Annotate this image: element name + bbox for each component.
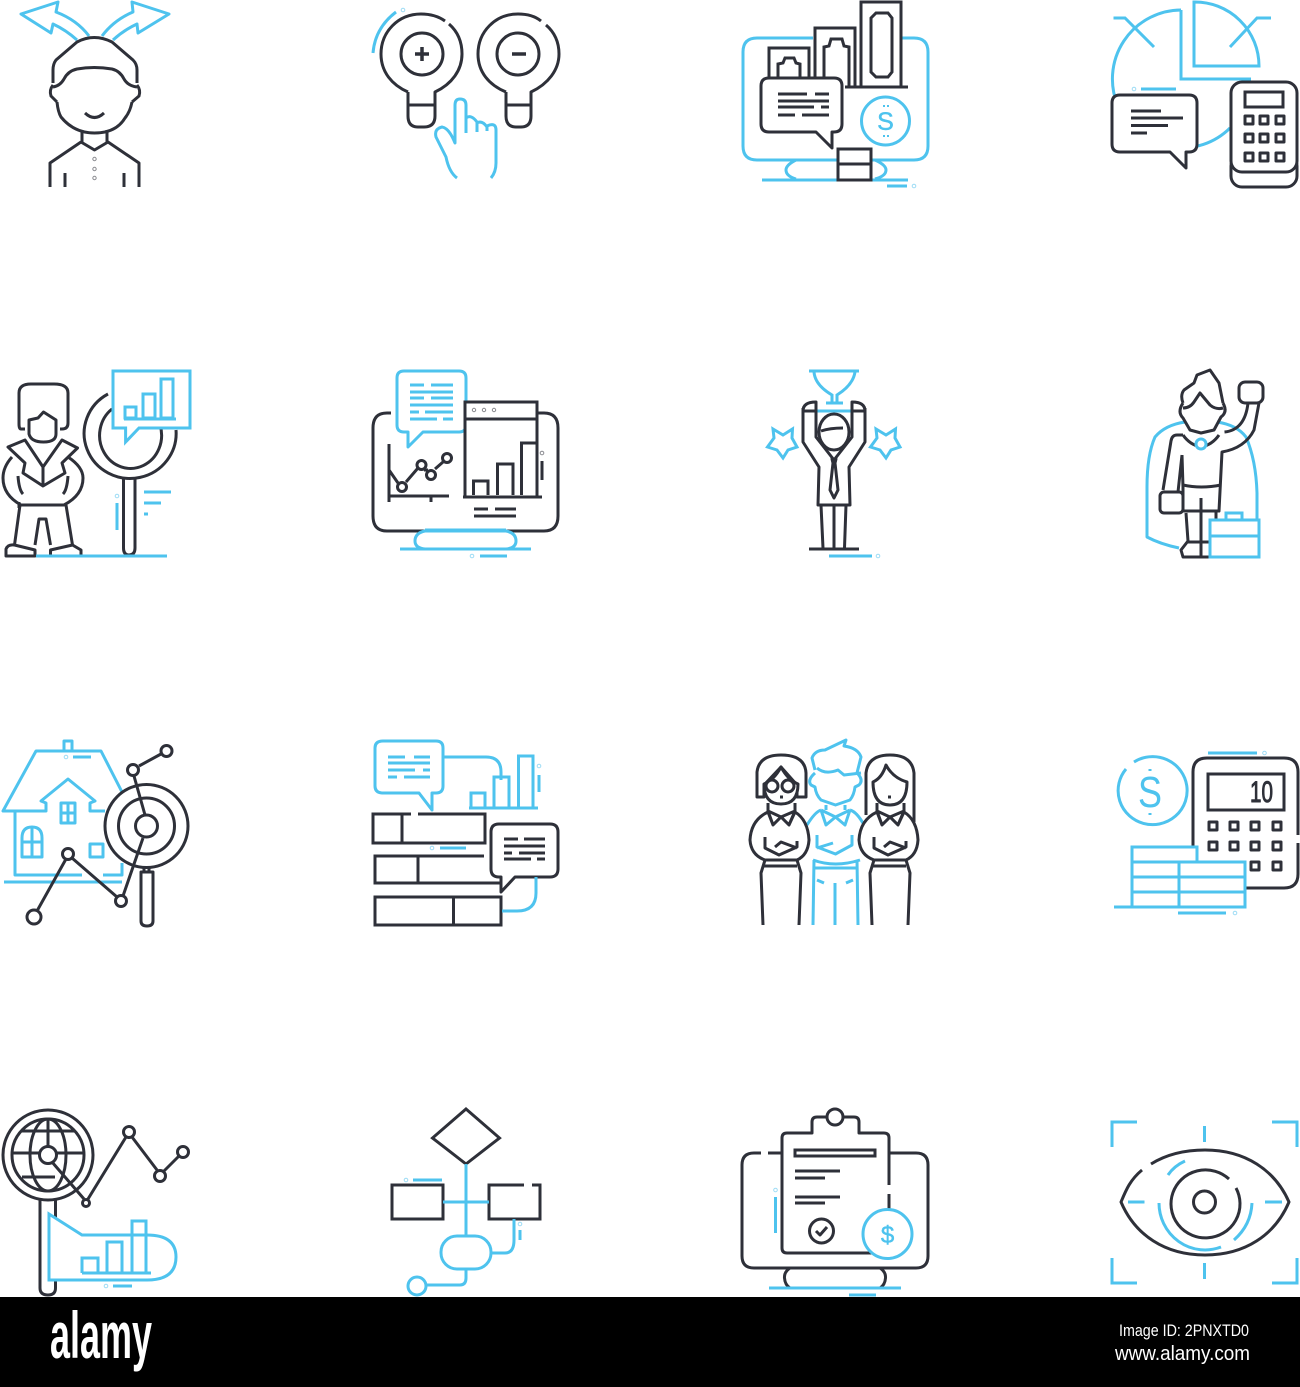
person xyxy=(3,384,83,556)
bar chart xyxy=(469,756,541,808)
dollar coin: $ xyxy=(881,1222,894,1249)
magnifier target xyxy=(105,784,188,926)
pointing hand xyxy=(373,8,496,178)
focus brackets and ticks xyxy=(1112,1122,1297,1283)
icon: eye with focus brackets xyxy=(1112,1122,1297,1283)
calculator body xyxy=(1193,758,1298,888)
dollar coin xyxy=(1118,757,1187,825)
icon: team of three with arms crossed xyxy=(750,740,918,925)
cape xyxy=(1147,422,1257,548)
icon: house with target and line chart xyxy=(3,741,188,926)
monitor xyxy=(742,1153,928,1288)
stars xyxy=(768,429,900,458)
bricks xyxy=(373,814,501,925)
clipboard xyxy=(782,1109,889,1253)
icon: person with diverging arrows xyxy=(21,2,169,187)
coin stacks xyxy=(1114,751,1266,915)
man in the middle xyxy=(807,740,864,925)
figure xyxy=(803,402,865,549)
icon: monitor with charts and speech bubble xyxy=(373,371,558,558)
icon: businessman raising trophy xyxy=(768,371,900,558)
house xyxy=(3,741,122,882)
speech bubble xyxy=(1112,95,1197,168)
icon: calculator, dollar coin and coin stacks xyxy=(1114,751,1298,915)
ground and accents xyxy=(36,492,171,556)
connectors xyxy=(404,1164,522,1295)
line chart xyxy=(52,1126,188,1206)
logo: alamy: alamy xyxy=(50,1298,152,1372)
minus bulb xyxy=(478,14,559,127)
plus bulb xyxy=(381,14,462,127)
icon: superhero businessman with briefcase xyxy=(1147,370,1263,557)
monitor stand xyxy=(400,530,531,558)
speech bubble xyxy=(761,78,842,148)
image id: Image ID: 2PNXTD0 xyxy=(1119,1321,1249,1340)
blue chart panel xyxy=(49,1214,176,1288)
person figure xyxy=(50,38,140,187)
monitor xyxy=(743,38,928,188)
eye outline xyxy=(1121,1150,1289,1255)
pie chart xyxy=(1112,2,1271,148)
shirt buttons xyxy=(93,157,96,180)
diamond and boxes xyxy=(392,1109,540,1219)
dollar coin xyxy=(862,97,910,145)
icon: clipboard on monitor with dollar coin xyxy=(742,1109,928,1295)
accent line xyxy=(829,554,880,558)
magnifying glass xyxy=(84,394,176,555)
dark speech bubble xyxy=(491,824,558,892)
blue speech bubble xyxy=(375,741,501,810)
chart bubble xyxy=(113,371,190,442)
hero figure xyxy=(1160,370,1263,557)
accents and base xyxy=(769,1188,901,1295)
footer bar xyxy=(0,1297,1300,1387)
woman with long hair xyxy=(859,755,918,925)
icon: monitor with banknote bars and speech bubble xyxy=(743,2,928,188)
calculator display value: 10 xyxy=(1250,776,1273,809)
speech bubble xyxy=(397,371,466,447)
dollar coin: S xyxy=(877,108,894,136)
magnifier with globe xyxy=(3,1110,93,1295)
connector xyxy=(502,877,536,911)
line chart xyxy=(389,444,542,516)
left and right arrows xyxy=(21,2,169,40)
icon: pie chart with speech bubble and calculator xyxy=(1112,2,1297,187)
woman with glasses xyxy=(750,755,809,925)
icon: plus and minus light bulbs with pointing hand xyxy=(373,8,559,178)
icon: flowchart xyxy=(392,1109,540,1295)
banknote bars xyxy=(769,2,908,87)
monitor frame xyxy=(373,413,558,531)
stacked box xyxy=(838,149,871,180)
iris arcs xyxy=(1159,1161,1252,1250)
line chart xyxy=(27,746,172,924)
dollar coin: S xyxy=(1138,768,1162,817)
dollar coin xyxy=(863,1210,912,1258)
briefcase xyxy=(1210,513,1259,557)
icon: globe magnifier with charts xyxy=(3,1110,188,1295)
icon: brick wall with speech bubbles and bar chart xyxy=(373,741,558,925)
icon: analyst with magnifier and chart bubble xyxy=(3,371,190,556)
medal xyxy=(1196,439,1206,449)
website: www.alamy.com xyxy=(1114,1343,1250,1365)
browser window with bars xyxy=(463,402,542,497)
trophy xyxy=(809,371,859,411)
calculator xyxy=(1231,82,1297,187)
